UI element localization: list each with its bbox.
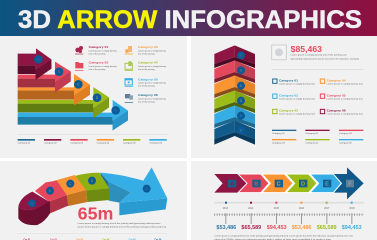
description: ipsum lorem ipsum is simply dummy text of the printing and typesetting industry	[78, 225, 166, 228]
category 05: Lorem ipsum is simply dummy	[138, 83, 166, 85]
segment C	[53, 175, 87, 206]
category 06: Category 06	[138, 93, 158, 97]
category labels	[23, 239, 162, 240]
panel: timeline	[191, 161, 377, 240]
legend: Category 06	[149, 141, 162, 144]
category 02: text of the printing	[89, 68, 105, 71]
icon: monitors	[125, 94, 133, 103]
values: $65,589	[241, 225, 261, 231]
legend: Category 05	[305, 142, 318, 145]
category 06: text of the printing	[138, 100, 155, 103]
legend: Category 05	[123, 141, 136, 144]
legend: Category 03	[70, 141, 83, 144]
category items: Lorem ipsum is simply dummy text	[327, 82, 363, 85]
legend	[272, 130, 363, 145]
category 05: text of the printing	[138, 85, 155, 88]
legend: Category 04	[272, 142, 285, 145]
description	[291, 54, 359, 60]
letter badges: B	[254, 181, 258, 187]
segment D	[75, 173, 109, 202]
chevron F	[214, 120, 255, 145]
category items: Lorem ipsum is simply dummy text	[279, 82, 316, 85]
header banner	[0, 0, 377, 36]
chevron A	[214, 45, 255, 68]
letter badges: D	[301, 181, 305, 187]
years	[223, 208, 355, 210]
letter badges	[228, 180, 354, 187]
category items: Lorem ipsum is simply dummy text	[327, 97, 363, 100]
values: $53,486	[292, 225, 312, 231]
big number: 65m	[78, 203, 113, 223]
segment A: A	[31, 202, 34, 206]
category items: Category 04	[327, 78, 346, 82]
chevron D	[214, 90, 255, 113]
letter badges: F	[348, 181, 352, 187]
description: Lorem ipsum is simply dummy text of the printing and typesetting industry. Lorem Ipsum has been the industry's standard dummy text ever	[214, 235, 353, 238]
chevron E	[214, 105, 255, 128]
years: 2015	[274, 208, 280, 210]
category items: Category 03	[279, 109, 298, 113]
arrow C: C	[77, 83, 80, 87]
category 01: Category 01	[89, 45, 109, 49]
icon: green chart	[125, 61, 133, 71]
category 03	[138, 45, 166, 55]
years: 2013	[223, 208, 229, 210]
category 03: text of the printing	[138, 52, 155, 55]
years: 2017	[324, 208, 330, 210]
category 04	[138, 61, 166, 71]
category items: Category 01	[279, 78, 298, 82]
values: $53,486	[216, 225, 236, 231]
chevron A: A	[240, 54, 243, 58]
arrow B	[18, 62, 71, 92]
category items	[273, 78, 363, 116]
values	[216, 225, 362, 231]
description: Lorem ipsum is simply dummy text of the printing and typesetting industry lorem	[78, 222, 161, 225]
chevron D: D	[240, 99, 243, 103]
category 04: text of the printing	[138, 68, 155, 71]
category 02	[89, 61, 117, 71]
icon: folder	[75, 62, 83, 71]
description: typesetting industry lorem ipsum has been the industry's standard	[291, 57, 359, 60]
legend: Category 06	[339, 142, 352, 145]
arrow B: B	[58, 70, 61, 74]
chevron row	[214, 167, 364, 199]
description: Lorem ipsum is simply dummy text of the printing and	[291, 54, 346, 57]
arrow A: A	[37, 58, 40, 62]
big number: $85,463	[291, 44, 322, 54]
segment B	[35, 181, 68, 213]
chevron B: B	[240, 69, 243, 73]
legend: Category 03	[339, 132, 352, 135]
category items: Lorem ipsum is simply dummy text	[279, 113, 316, 116]
segment E arrowhead	[100, 167, 167, 215]
chevron C	[214, 75, 255, 98]
panel: stacked chevrons	[191, 36, 377, 158]
timeline bar	[214, 202, 364, 204]
panel: curved 3D arrow	[0, 161, 187, 240]
category 06	[138, 93, 166, 103]
category 05: Category 05	[138, 77, 158, 81]
chevron E: E	[240, 114, 243, 118]
category items: Category 02	[279, 93, 298, 97]
segment C: C	[69, 182, 72, 186]
category 03: Lorem ipsum is simply dummy	[138, 50, 166, 52]
category 04: Category 04	[138, 61, 158, 65]
letter badges: A	[230, 181, 234, 187]
legend: Category 02	[44, 141, 57, 144]
category 03: Category 03	[138, 45, 158, 49]
arrow E: E	[115, 109, 118, 113]
chevron C: C	[240, 84, 243, 88]
segment E arrowhead: E	[146, 187, 149, 191]
category 02: Lorem ipsum is simply dummy	[89, 66, 117, 68]
category 01: Lorem ipsum is simply dummy	[89, 50, 117, 52]
legend: Category 01	[272, 132, 285, 135]
chevron F: F	[240, 129, 242, 133]
arrow D: D	[96, 96, 99, 100]
category 01: text of the printing	[89, 52, 105, 55]
category 01	[89, 45, 117, 55]
legend: Category 01	[18, 141, 30, 144]
icon: blue window	[125, 79, 133, 87]
category items: Lorem ipsum is simply dummy text	[327, 113, 363, 116]
chevron B	[214, 60, 255, 83]
image placeholder	[272, 45, 286, 60]
values: $65,589	[317, 225, 337, 231]
category items: Lorem ipsum is simply dummy text	[279, 97, 316, 100]
legend: Category 04	[97, 141, 109, 144]
legend	[18, 139, 167, 144]
segment B: B	[49, 189, 52, 193]
category 02: Category 02	[89, 61, 109, 65]
letter badges: E	[325, 181, 329, 187]
category 06: Lorem ipsum is simply dummy	[138, 98, 166, 100]
years: 2016	[299, 208, 305, 210]
legend: Category 02	[305, 132, 318, 135]
years: 2014	[248, 208, 254, 210]
icon: gears	[75, 46, 83, 54]
arrow C	[18, 74, 90, 105]
values: $94,453	[267, 225, 287, 231]
category 05	[138, 77, 166, 88]
years: 2018	[349, 208, 355, 210]
icon: orange stack	[125, 46, 133, 54]
ruler	[214, 213, 364, 224]
panel: stepped 3D arrows	[0, 36, 187, 158]
category items: Category 06	[327, 109, 346, 113]
letter badges: C	[277, 181, 281, 187]
category items: Category 05	[327, 93, 346, 97]
title: 3D ARROW INFOGRAPHICS	[18, 6, 362, 34]
category 04: Lorem ipsum is simply dummy	[138, 66, 166, 68]
arrow A	[18, 48, 51, 80]
description	[78, 222, 166, 228]
segment D: D	[91, 179, 94, 183]
description	[214, 235, 353, 240]
segment A	[18, 192, 50, 225]
arrow D	[18, 87, 109, 118]
values: $94,453	[342, 225, 362, 231]
arrow E	[18, 100, 128, 130]
